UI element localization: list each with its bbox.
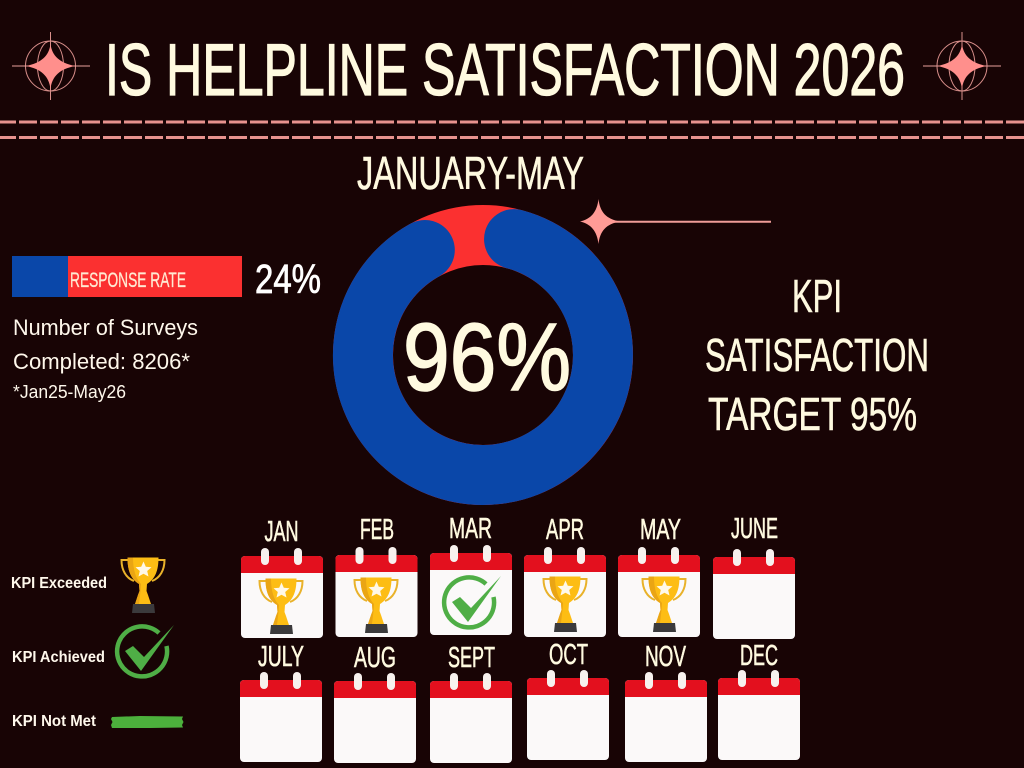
calendar: March, KPI achieved (430, 513, 512, 635)
response rate bar (12, 256, 242, 297)
calendar: August, empty (334, 642, 416, 763)
response rate value: 24% (255, 256, 321, 302)
surveys completed: Completed: 8206* (13, 349, 190, 374)
surveys completed: *Jan25-May26 (13, 382, 126, 402)
legend: KPI exceeded (11, 558, 164, 613)
calendar: October, empty: OCT (549, 639, 588, 671)
calendar: December, empty (718, 640, 800, 760)
calendar: January, KPI exceeded (241, 516, 323, 638)
surveys completed (13, 315, 198, 402)
KPI target text: SATISFACTION (705, 329, 929, 381)
legend: KPI exceeded: KPI Exceeded (11, 575, 107, 592)
donut chart: 96% (363, 235, 603, 475)
calendar: June, empty (713, 513, 795, 639)
KPI target text: KPI (792, 270, 842, 322)
calendar: September, empty (430, 642, 512, 763)
icon: right sparkle globe (923, 32, 1001, 100)
icon: left sparkle globe (12, 32, 90, 100)
legend: KPI achieved (12, 625, 174, 676)
callout star and line (580, 199, 771, 244)
KPI target text (705, 270, 929, 440)
calendar: October, empty (527, 639, 609, 760)
calendar: April, KPI exceeded: APR (546, 514, 584, 546)
calendar: July, empty: JULY (258, 641, 304, 673)
calendar: February, KPI exceeded (336, 514, 418, 637)
legend: KPI achieved: KPI Achieved (12, 649, 105, 666)
heading: period: JANUARY-MAY (357, 147, 584, 199)
KPI target text: TARGET 95% (708, 388, 917, 440)
surveys completed: Number of Surveys (13, 315, 198, 340)
calendar: May, KPI exceeded: MAY (640, 514, 681, 546)
legend: KPI not met: KPI Not Met (12, 713, 97, 730)
calendar: December, empty: DEC (740, 640, 778, 672)
calendar: November, empty: NOV (645, 641, 686, 673)
calendar: May, KPI exceeded (618, 514, 700, 637)
calendar: February, KPI exceeded: FEB (360, 514, 394, 546)
calendar: March, KPI achieved: MAR (449, 513, 492, 545)
calendar: July, empty (240, 641, 322, 762)
legend: KPI not met (12, 713, 184, 730)
calendar: April, KPI exceeded (524, 514, 606, 637)
calendar: September, empty: SEPT (448, 642, 495, 674)
calendar: August, empty: AUG (354, 642, 396, 674)
calendar: January, KPI exceeded: JAN (264, 516, 298, 548)
calendar: November, empty (625, 641, 707, 762)
calendar: June, empty: JUNE (731, 513, 778, 545)
donut chart: 96%: 96% (403, 304, 571, 411)
response rate bar: RESPONSE RATE (70, 269, 186, 292)
